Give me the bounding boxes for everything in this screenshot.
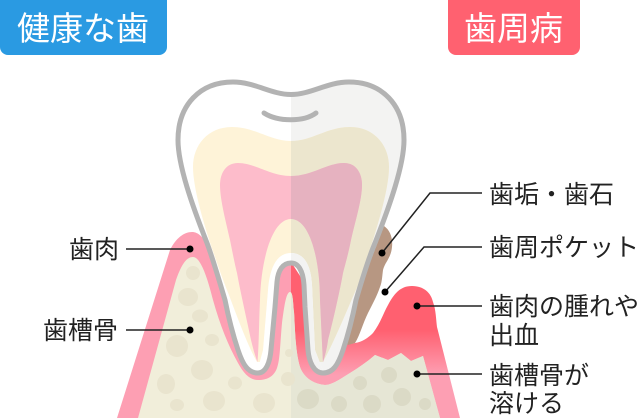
label: swollen and bleeding gums: 歯肉の腫れや: [489, 293, 639, 321]
label: swollen and bleeding gums: [414, 293, 639, 350]
label: plaque and tartar: 歯垢・歯石: [489, 181, 614, 209]
gum: healthy side: [117, 232, 291, 418]
dentin: [193, 127, 389, 362]
label: alveolar bone: [43, 317, 194, 345]
panel: healthy label: [0, 0, 167, 55]
inner tooth layers: [193, 80, 411, 380]
tooth: [178, 80, 411, 380]
label: gum: [69, 236, 194, 264]
label: bone dissolving: [414, 362, 589, 418]
panel: healthy label: 健康な歯: [17, 10, 149, 47]
gum: inflamed side: [291, 262, 460, 418]
panel: periodontal disease label: 歯周病: [464, 10, 563, 47]
label: periodontal pocket: 歯周ポケット: [489, 234, 639, 262]
label: periodontal pocket: [382, 234, 639, 296]
pulp: [220, 163, 362, 362]
label: bone dissolving: 歯槽骨が: [489, 362, 589, 390]
inner root white band: [260, 253, 320, 362]
crown groove: [264, 113, 316, 120]
label: gum: 歯肉: [69, 236, 119, 264]
label: bone dissolving: 溶ける: [489, 390, 564, 418]
panel: periodontal disease label: [448, 0, 580, 55]
tartar deposit: [340, 226, 392, 345]
label: plaque and tartar: [378, 181, 614, 256]
bone spots: [157, 266, 431, 413]
alveolar bone: [138, 257, 440, 418]
label: swollen and bleeding gums: 出血: [489, 322, 539, 350]
label: alveolar bone: 歯槽骨: [43, 317, 118, 345]
tooth outline: [178, 82, 404, 373]
